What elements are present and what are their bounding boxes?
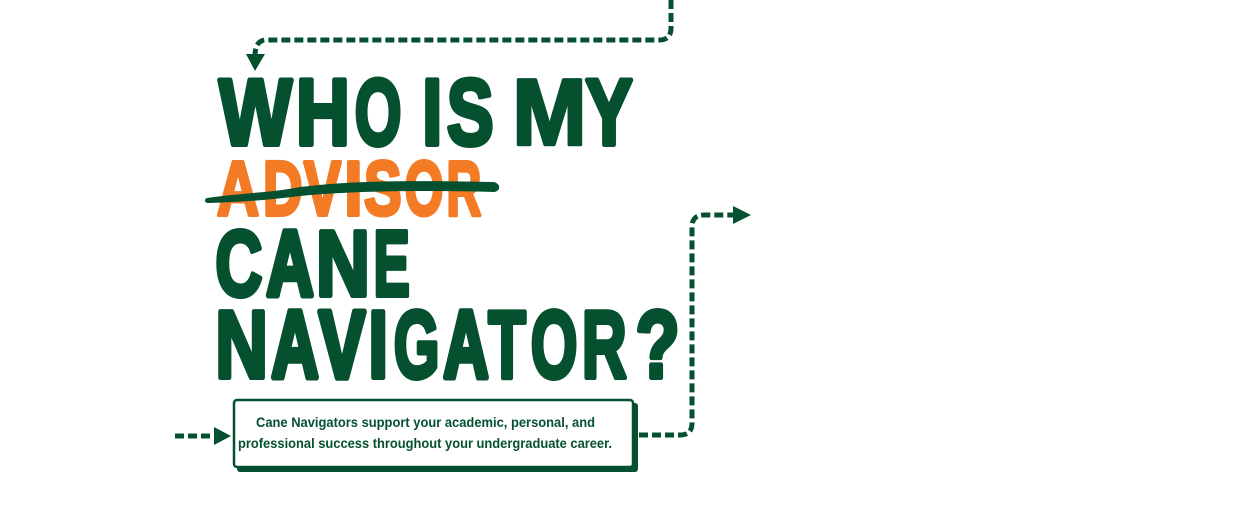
title line: WHO IS MY: I	[422, 60, 442, 164]
crossed-out word: ADVISOR: R	[446, 146, 481, 232]
title line: WHO IS MY: Y	[586, 60, 632, 164]
title line: NAVIGATOR?: ?	[636, 292, 680, 398]
title line: CANE: N	[316, 212, 370, 316]
arrow: dashed connector from box to upper right	[639, 206, 751, 435]
arrow: top dashed connector into title	[246, 0, 671, 71]
title line: WHO IS MY: H	[296, 60, 350, 164]
callout box	[234, 400, 638, 472]
title line: NAVIGATOR?: V	[319, 292, 365, 398]
title line: CANE: A	[266, 212, 314, 316]
title line: WHO IS MY: O	[355, 60, 402, 164]
title line: NAVIGATOR?: N	[215, 292, 268, 398]
title line: WHO IS MY: S	[447, 60, 494, 164]
title line: NAVIGATOR?: T	[488, 292, 526, 398]
crossed-out word: ADVISOR: I	[344, 146, 362, 232]
callout text	[238, 414, 612, 451]
crossed-out word: ADVISOR: S	[364, 146, 402, 232]
callout text: Cane Navigators support your academic, personal, and	[256, 414, 595, 430]
crossed-out word: ADVISOR: A	[217, 146, 259, 232]
title line: NAVIGATOR?: O	[531, 292, 578, 398]
crossed-out word: ADVISOR: D	[263, 146, 303, 232]
title line: CANE: C	[215, 212, 262, 316]
title line: WHO IS MY: M	[512, 60, 586, 164]
title line: NAVIGATOR?: I	[368, 292, 388, 398]
title	[205, 60, 680, 398]
title line: NAVIGATOR?: A	[444, 292, 488, 398]
title line: NAVIGATOR?: G	[394, 292, 440, 398]
callout text: professional success throughout your undergraduate career.	[238, 435, 612, 451]
crossed-out word: ADVISOR	[205, 146, 499, 232]
title line: NAVIGATOR?: R	[582, 292, 627, 398]
crossed-out word: ADVISOR: O	[405, 146, 443, 232]
title line: CANE: E	[374, 212, 410, 316]
title line: WHO IS MY: W	[219, 60, 292, 164]
crossed-out word: ADVISOR: V	[304, 146, 341, 232]
title line: NAVIGATOR?: A	[272, 292, 318, 398]
arrow: dashed arrow into text box	[175, 427, 231, 445]
